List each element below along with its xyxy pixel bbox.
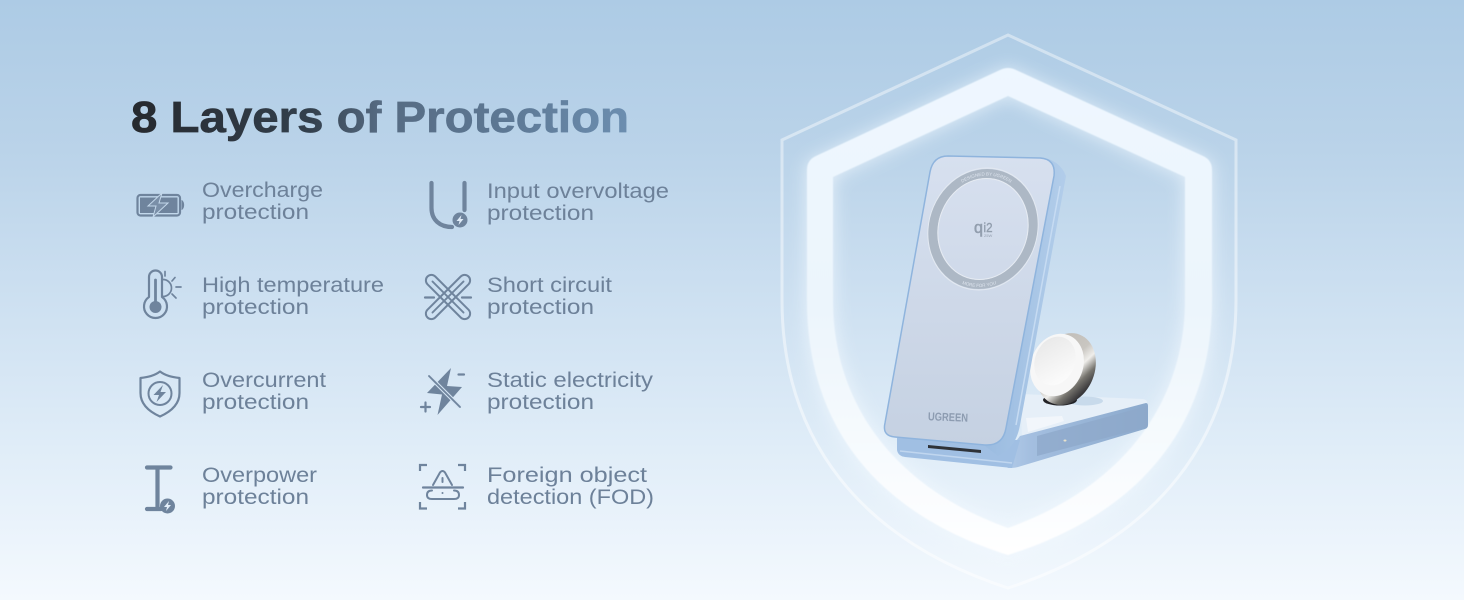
text (202, 179, 323, 224)
text: protection (487, 202, 594, 225)
text: Short circuit (487, 274, 612, 297)
text (487, 369, 654, 414)
qi2 logo: 25W (984, 233, 992, 238)
text: protection (202, 486, 309, 509)
text (487, 464, 654, 509)
icon: scan frame with warning (420, 465, 465, 508)
title: 8 Layers of Protection (131, 93, 629, 142)
text (202, 369, 326, 414)
text: High temperature (202, 274, 384, 297)
text: protection (202, 391, 309, 414)
text: protection (202, 296, 309, 319)
item: overcharge protection (138, 179, 323, 224)
item: input overvoltage protection (432, 180, 669, 228)
text: Input overvoltage (487, 180, 669, 203)
item: high temperature protection (144, 270, 384, 319)
text: protection (202, 201, 309, 224)
icon: i-beam with bolt (147, 468, 175, 514)
qi2 logo: i2 (984, 220, 992, 235)
icon: crossed wires (424, 273, 472, 321)
item: short circuit protection (424, 273, 612, 321)
text (202, 464, 317, 509)
stand side edge (985, 157, 1066, 456)
text: Foreign object (487, 464, 647, 487)
icon: crossed-out bolt (421, 368, 464, 415)
shield graphic (782, 35, 1236, 588)
item: static electricity protection (421, 368, 654, 415)
ring text top: DESIGNED BY UGREEN (961, 172, 1012, 182)
shield outer thin line (782, 35, 1236, 588)
side highlight (1016, 186, 1060, 425)
item: overpower protection (147, 464, 317, 514)
base front (1000, 403, 1148, 468)
qi2 logo (974, 218, 992, 238)
text: Overcurrent (202, 369, 326, 392)
product: wireless charging stand (884, 155, 1148, 468)
text: Overpower (202, 464, 317, 487)
icon: U curve with bolt (432, 183, 468, 228)
text (487, 274, 612, 319)
text (487, 180, 669, 225)
item: overcurrent protection (140, 369, 326, 416)
ring text bottom: MORE FOR YOU (962, 281, 996, 287)
item: foreign object detection (420, 464, 654, 509)
text: Static electricity (487, 369, 654, 392)
stand foot (897, 438, 1020, 468)
base recess right (1067, 396, 1103, 406)
qi2 logo: q (974, 218, 983, 237)
icon: battery (138, 193, 184, 217)
base top surface (1020, 394, 1147, 438)
stand face panel (884, 155, 1055, 446)
text: detection (FOD) (487, 486, 654, 509)
magnetic ring (928, 168, 1038, 290)
text: protection (487, 391, 594, 414)
text: Overcharge (202, 179, 323, 202)
protection list (138, 179, 669, 514)
watch charging puck (1021, 324, 1106, 414)
shield glow (807, 68, 1212, 555)
base recess (1026, 416, 1064, 432)
icon: thermometer (144, 270, 181, 318)
text (202, 274, 384, 319)
shield thick band (807, 68, 1212, 555)
brand logo: UGREEN (928, 411, 968, 425)
icon: shield with bolt (140, 372, 180, 416)
text: protection (487, 296, 594, 319)
